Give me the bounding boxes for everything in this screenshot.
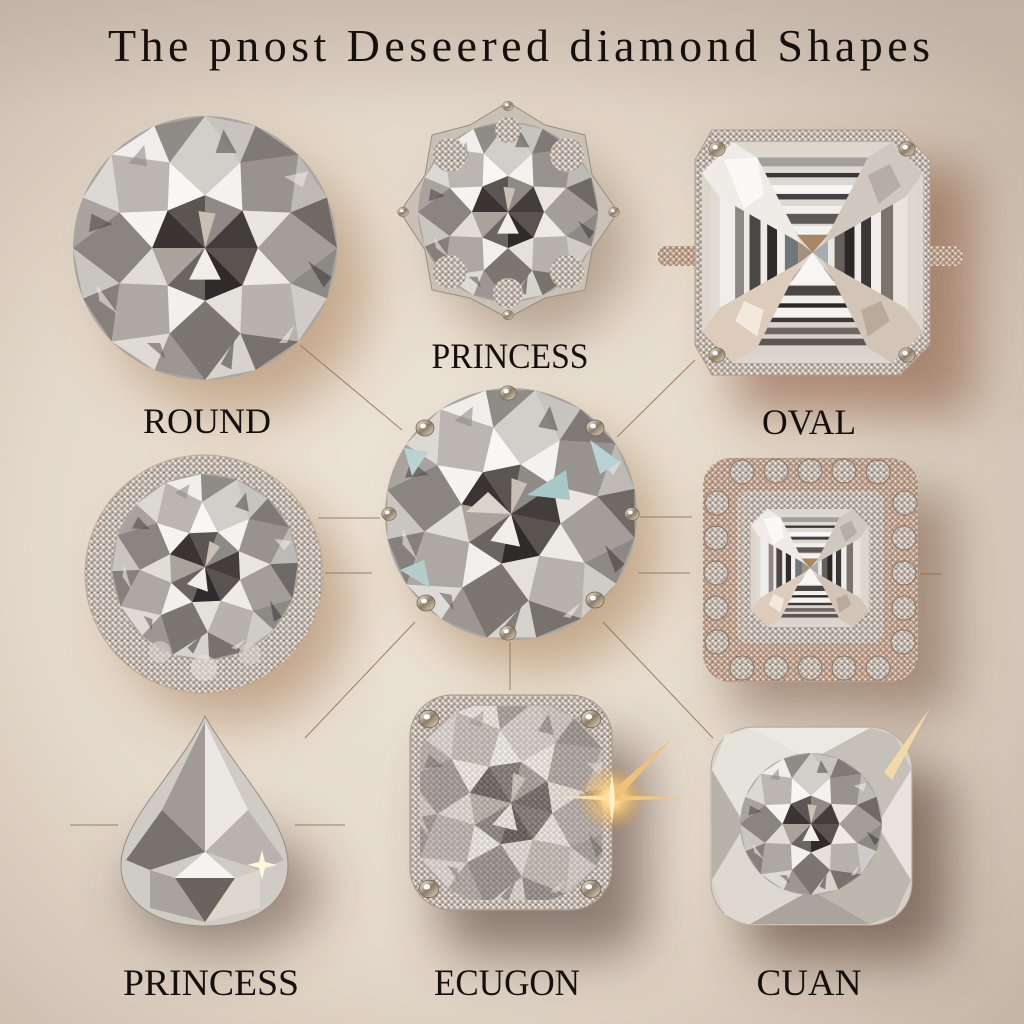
diamond: round, top left	[73, 116, 337, 380]
diamond: ornate round with side stones, top centre	[398, 101, 619, 320]
label: princess, bottom left: PRINCESS	[123, 963, 299, 1004]
label: round: ROUND	[143, 401, 271, 441]
diamond: halo round, middle left	[85, 448, 324, 693]
diamond: pear	[121, 716, 288, 926]
connector lines	[70, 345, 942, 825]
label: oval: OVAL	[762, 402, 856, 442]
cast shadows	[108, 150, 975, 960]
ring: square halo emerald, middle right	[703, 458, 918, 682]
title: The pnost Deseered diamond Shapes	[108, 20, 930, 71]
label: princess, top centre: PRINCESS	[432, 336, 588, 376]
ring: large emerald cut, top right	[658, 130, 963, 375]
sparkle on cushion	[560, 738, 688, 832]
label: ecugon: ECUGON	[434, 963, 580, 1004]
diamond: cushion, bottom right	[711, 708, 930, 925]
label: cuan: CUAN	[756, 963, 862, 1004]
diamond: central round brilliant with prongs	[363, 366, 659, 662]
diamond: cushion with prongs, bottom centre	[383, 675, 639, 931]
